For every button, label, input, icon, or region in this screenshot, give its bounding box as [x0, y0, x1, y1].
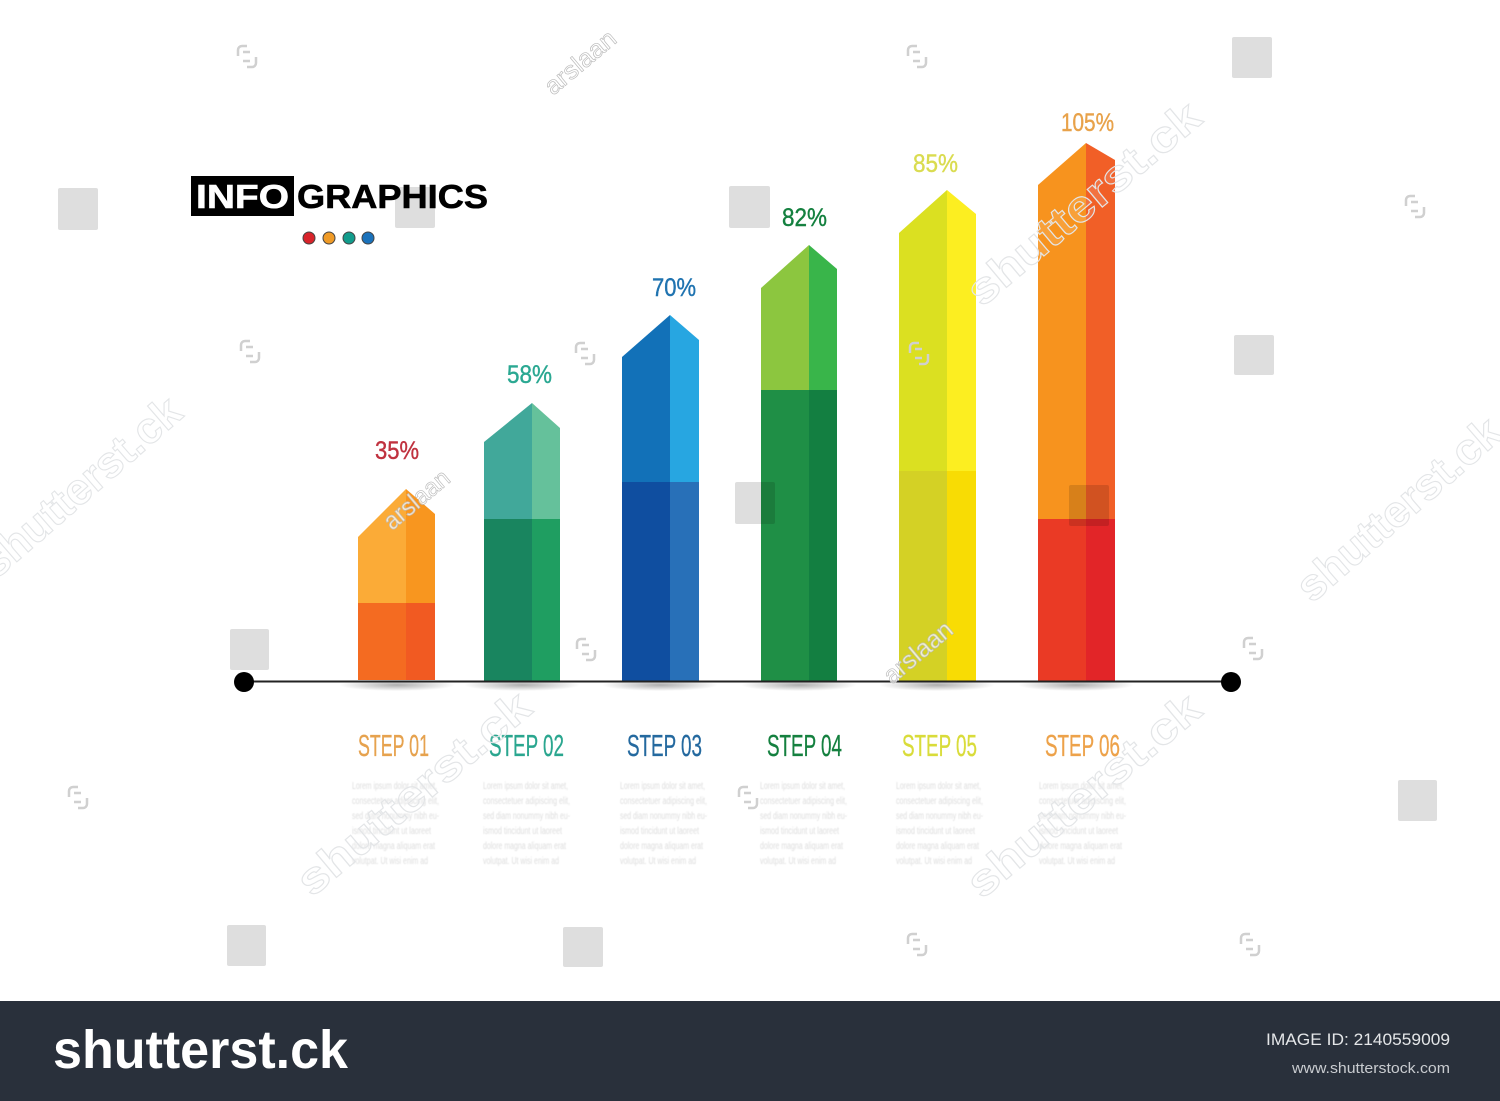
watermark: shutterstock diagonals: shutterst.ck [287, 681, 541, 906]
body text: step 05: consectetuer adipiscing elit, [896, 796, 983, 807]
bar: step 06 [1038, 143, 1115, 681]
body text: step 03: Lorem ipsum dolor sit amet, [620, 781, 705, 792]
watermark squares [58, 37, 1437, 967]
watermark: arslaan: arslaan [378, 464, 456, 536]
body text: step 06: dolore magna aliquam erat [1039, 841, 1122, 852]
axis line [234, 672, 1241, 692]
body text: step 06: ismod tincidunt ut laoreet [1039, 826, 1118, 837]
footer logo: shutterst.ck [53, 1020, 349, 1080]
title: infographics logo: INFO [196, 178, 289, 215]
body text: step 03: volutpat. Ut wisi enim ad [620, 856, 696, 867]
percent labels: 70% [652, 274, 696, 302]
watermark: arslaan: arslaan [878, 615, 959, 690]
footer bar [0, 1001, 1500, 1101]
watermark: arslaan [378, 25, 959, 690]
body text: step 01: sed diam nonummy nibh eu- [352, 811, 439, 822]
body text: step 03: sed diam nonummy nibh eu- [620, 811, 707, 822]
body text: step 06: consectetuer adipiscing elit, [1039, 796, 1126, 807]
legend dots [303, 232, 374, 244]
body text: step 04: dolore magna aliquam erat [760, 841, 843, 852]
bar: step 01 [358, 489, 435, 680]
body text: step 05: Lorem ipsum dolor sit amet, [896, 781, 981, 792]
step labels: STEP 03 [627, 728, 702, 763]
bar: step 02 [484, 403, 560, 682]
body text: step 05 [896, 781, 983, 867]
step labels: STEP 06 [1045, 728, 1120, 763]
body text: step 06 [1039, 781, 1126, 867]
watermark: shutterstock diagonals: shutterst.ck [957, 91, 1211, 316]
body text: step 04: ismod tincidunt ut laoreet [760, 826, 839, 837]
percent labels: 85% [913, 150, 958, 178]
body text: step 06: Lorem ipsum dolor sit amet, [1039, 781, 1124, 792]
body text: step 04 [760, 781, 847, 867]
bar shadows [339, 679, 1134, 691]
body text: step 01: Lorem ipsum dolor sit amet, [352, 781, 437, 792]
body text: step 06: volutpat. Ut wisi enim ad [1039, 856, 1115, 867]
body text: step 03 [620, 781, 707, 867]
body text: step 03: dolore magna aliquam erat [620, 841, 703, 852]
body text: step 01: volutpat. Ut wisi enim ad [352, 856, 428, 867]
step labels: STEP 04 [767, 728, 842, 763]
body text: step 04: volutpat. Ut wisi enim ad [760, 856, 836, 867]
bar: step 05 [899, 190, 976, 681]
bar: step 03 [622, 315, 699, 682]
body text: step 02: ismod tincidunt ut laoreet [483, 826, 562, 837]
title: infographics logo: GRAPHICS [297, 178, 488, 215]
website: www.shutterstock.com [1291, 1060, 1450, 1077]
image id: IMAGE ID: 2140559009 [1266, 1030, 1450, 1049]
body text: step 04: consectetuer adipiscing elit, [760, 796, 847, 807]
body text: step 03: consectetuer adipiscing elit, [620, 796, 707, 807]
body text: step 01: consectetuer adipiscing elit, [352, 796, 439, 807]
step labels: STEP 05 [902, 728, 977, 763]
body text: step 01: ismod tincidunt ut laoreet [352, 826, 431, 837]
body text: step 02: consectetuer adipiscing elit, [483, 796, 570, 807]
percent labels: 105% [1061, 109, 1114, 137]
body text: step 01 [352, 781, 439, 867]
body text: step 02: Lorem ipsum dolor sit amet, [483, 781, 568, 792]
watermark: shutterstock diagonals: shutterst.ck [957, 683, 1211, 908]
step labels: STEP 02 [489, 728, 564, 763]
title: infographics logo [191, 176, 488, 216]
body text: step 05: dolore magna aliquam erat [896, 841, 979, 852]
body text: step 05: sed diam nonummy nibh eu- [896, 811, 983, 822]
body text: step 02: volutpat. Ut wisi enim ad [483, 856, 559, 867]
watermark: shutterstock diagonals [0, 91, 1500, 908]
percent labels: 58% [507, 361, 552, 389]
step labels: STEP 01 [358, 728, 429, 763]
body text: step 01: dolore magna aliquam erat [352, 841, 435, 852]
watermark: small icons [69, 46, 1424, 955]
body text: step 04: sed diam nonummy nibh eu- [760, 811, 847, 822]
body text: step 02: sed diam nonummy nibh eu- [483, 811, 570, 822]
percent labels: 82% [782, 204, 827, 232]
body text: step 05: ismod tincidunt ut laoreet [896, 826, 975, 837]
body text: step 02 [483, 781, 570, 867]
step labels [358, 728, 1120, 763]
percent labels [375, 109, 1114, 465]
body text: step 04: Lorem ipsum dolor sit amet, [760, 781, 845, 792]
body text: step 02: dolore magna aliquam erat [483, 841, 566, 852]
body text: step 05: volutpat. Ut wisi enim ad [896, 856, 972, 867]
bar: step 04 [761, 245, 837, 682]
watermark: arslaan: arslaan [539, 25, 622, 101]
body text: step 03: ismod tincidunt ut laoreet [620, 826, 699, 837]
body text: step 06: sed diam nonummy nibh eu- [1039, 811, 1126, 822]
percent labels: 35% [375, 437, 419, 465]
